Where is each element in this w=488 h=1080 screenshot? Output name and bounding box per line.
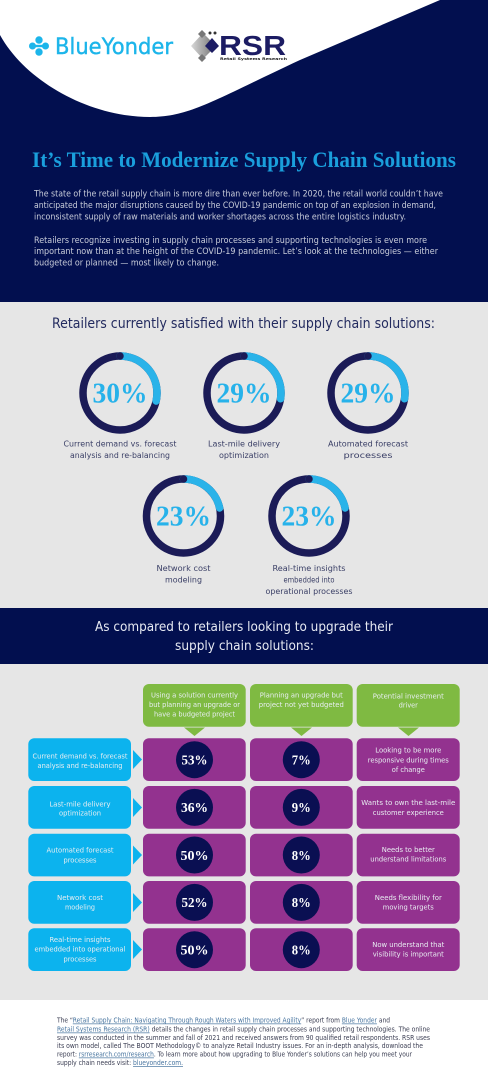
- donut: 30%: Current demand vs. forecast: [64, 440, 176, 448]
- donut: 23% real-time: embedded into: [284, 576, 335, 584]
- donut: 30%: analysis and re-balancing: [70, 451, 170, 460]
- row: automated forecast: Automated forecast: [46, 846, 114, 855]
- footer: source text: supply chain needs visit: blueyonder.com.: [57, 1059, 183, 1067]
- intro paragraph 1: inconsistent supply of raw materials and worker shortages across the entire logistics industry.: [34, 212, 406, 222]
- donut: 30%: 30%: [92, 378, 148, 410]
- row: network cost: modeling: [65, 903, 95, 912]
- column header: investment driver: driver: [399, 701, 419, 710]
- footer: source text: The “Retail Supply Chain: Navigating Through Rough Waters with Improved Agility” report from Blue Yonder and: [56, 1016, 390, 1024]
- logo: Blue Yonder: BlueYonder: [55, 35, 174, 60]
- title: It’s Time to Modernize Supply Chain Solutions: [32, 147, 456, 172]
- row: last-mile: Last-mile delivery: [50, 799, 111, 808]
- intro paragraph 1: [33, 190, 443, 222]
- row: current demand: 7%: [292, 754, 311, 768]
- row: network cost: [28, 881, 460, 924]
- donut: 29% last-mile: optimization: [219, 451, 269, 460]
- arrow: [133, 893, 142, 912]
- row: real-time insights: visibility is important: [373, 950, 444, 959]
- row: automated forecast: 50%: [180, 849, 208, 864]
- row: network cost: Needs flexibility for: [375, 893, 443, 902]
- row: last-mile: Wants to own the last-mile: [361, 798, 456, 807]
- column header: using a solution: [143, 684, 246, 736]
- footer: source text: report: rsrresearch.com/research. To learn more about how upgrading to Blue Yonder’s solutions can help you meet your: [57, 1050, 412, 1058]
- column header: planning an upgrade: project not yet budgeted: [259, 700, 344, 709]
- column header: using a solution: Using a solution currently: [151, 690, 239, 699]
- donut: 29% automated: [328, 352, 408, 460]
- footer: source text: [56, 1016, 430, 1067]
- row: network cost: 52%: [182, 896, 208, 911]
- footer: source text: Retail Systems Research (RSR) details the changes in retail supply chain processes and supporting technologies. The online: [57, 1026, 430, 1034]
- intro paragraph 2: budgeted or planned — most likely to change.: [34, 258, 219, 268]
- intro paragraph 1: anticipated the major disruptions caused by the COVID-19 pandemic on top of an explosion in demand,: [34, 201, 436, 211]
- donut: 23% network: modeling: [165, 576, 202, 584]
- row: real-time insights: 50%: [180, 944, 208, 958]
- row: real-time insights: Now understand that: [372, 940, 444, 949]
- donut: 23% real-time: operational processes: [266, 587, 352, 596]
- row: automated forecast: processes: [64, 855, 97, 864]
- row: automated forecast: Needs to better: [382, 845, 436, 854]
- donut: 23% real-time: 23%: [282, 500, 336, 532]
- arrow: [133, 750, 142, 769]
- logo: RSR: [191, 30, 288, 62]
- row: automated forecast: understand limitations: [370, 855, 446, 864]
- row: current demand: Current demand vs. forecast: [32, 751, 128, 760]
- panel: satisfied retailers: [0, 302, 488, 608]
- arrow: [133, 940, 142, 959]
- column header: using a solution: but planning an upgrade or: [149, 700, 241, 709]
- donut: 29% last-mile: 29%: [216, 378, 272, 410]
- heading: satisfied: Retailers currently satisfied with their supply chain solutions:: [52, 316, 435, 332]
- row: last-mile: optimization: [59, 809, 101, 818]
- column header: investment driver: Potential investment: [373, 691, 444, 700]
- icon: Blue Yonder dots: [29, 36, 49, 56]
- band: comparison heading: [0, 608, 488, 664]
- row: network cost: Network cost: [57, 893, 103, 902]
- row: network cost: moving targets: [383, 903, 434, 912]
- donut: 23% real-time: [266, 475, 352, 596]
- row: real-time insights: embedded into operational: [34, 945, 126, 954]
- row: last-mile: customer experience: [373, 808, 444, 817]
- footer: source text: its own model, called The BOOT Methodology© to analyze Retail Industry issues. For an in-depth analysis, download the: [57, 1042, 423, 1050]
- donut: 29% automated: Automated forecast: [328, 440, 408, 448]
- intro paragraph 2: important now than at the height of the COVID-19 pandemic. Let’s look at the technologies — either: [34, 247, 438, 257]
- intro paragraph 2: [34, 236, 438, 268]
- donut: 29% automated: 29%: [340, 378, 396, 410]
- row: real-time insights: Real-time insights: [50, 935, 111, 944]
- panel: upgrade table: [0, 664, 488, 1000]
- row: current demand: of change: [392, 765, 425, 774]
- logo: RSR: Retail Systems Research: [220, 57, 288, 61]
- row: automated forecast: 8%: [292, 849, 311, 864]
- header panel: [0, 0, 488, 302]
- column header: investment driver: [357, 684, 460, 736]
- intro paragraph 2: Retailers recognize investing in supply chain processes and supporting technologies is even more: [34, 236, 427, 246]
- donut: 29% automated: processes: [344, 451, 392, 460]
- donut: 29% last-mile: Last-mile delivery: [208, 440, 280, 448]
- row: real-time insights: processes: [64, 954, 97, 963]
- arrow: [133, 846, 142, 864]
- column header: planning an upgrade: [250, 684, 353, 736]
- column header: using a solution: have a budgeted project: [154, 710, 235, 719]
- row: last-mile: 9%: [292, 801, 311, 816]
- row: last-mile: [28, 786, 460, 829]
- column header: planning an upgrade: Planning an upgrade but: [260, 691, 343, 700]
- donut: 23% network: [146, 475, 220, 584]
- intro paragraph 1: The state of the retail supply chain is more dire than ever before. In 2020, the retail world couldn’t have: [33, 190, 443, 200]
- row: automated forecast: [28, 834, 460, 876]
- row: last-mile: 36%: [181, 801, 208, 816]
- donut: 23% network: Network cost: [156, 564, 210, 573]
- logo: RSR: RSR: [219, 30, 286, 61]
- row: current demand: analysis and re-balancing: [38, 761, 123, 770]
- arrow: [133, 798, 142, 817]
- row: real-time insights: [28, 928, 460, 971]
- white curved header shape: [0, 0, 440, 117]
- footer: source text: survey was conducted in the summer and fall of 2021 and received answers from 90 qualified retail respondents. RSR uses: [57, 1034, 430, 1042]
- donut: 29% last-mile: [207, 352, 281, 460]
- donut: 23% real-time: Real-time insights: [272, 564, 346, 573]
- band: comparison heading: As compared to retailers looking to upgrade their: [95, 620, 394, 635]
- row: current demand: [28, 738, 460, 781]
- row: current demand: 53%: [182, 754, 208, 768]
- row: real-time insights: 8%: [292, 944, 311, 958]
- band: comparison heading: supply chain solutions:: [175, 639, 314, 654]
- donut: 23% network: 23%: [156, 500, 211, 532]
- row: current demand: Looking to be more: [375, 746, 442, 755]
- row: network cost: 8%: [292, 896, 311, 911]
- row: current demand: responsive during times: [368, 755, 449, 764]
- donut: 30%: [64, 352, 176, 460]
